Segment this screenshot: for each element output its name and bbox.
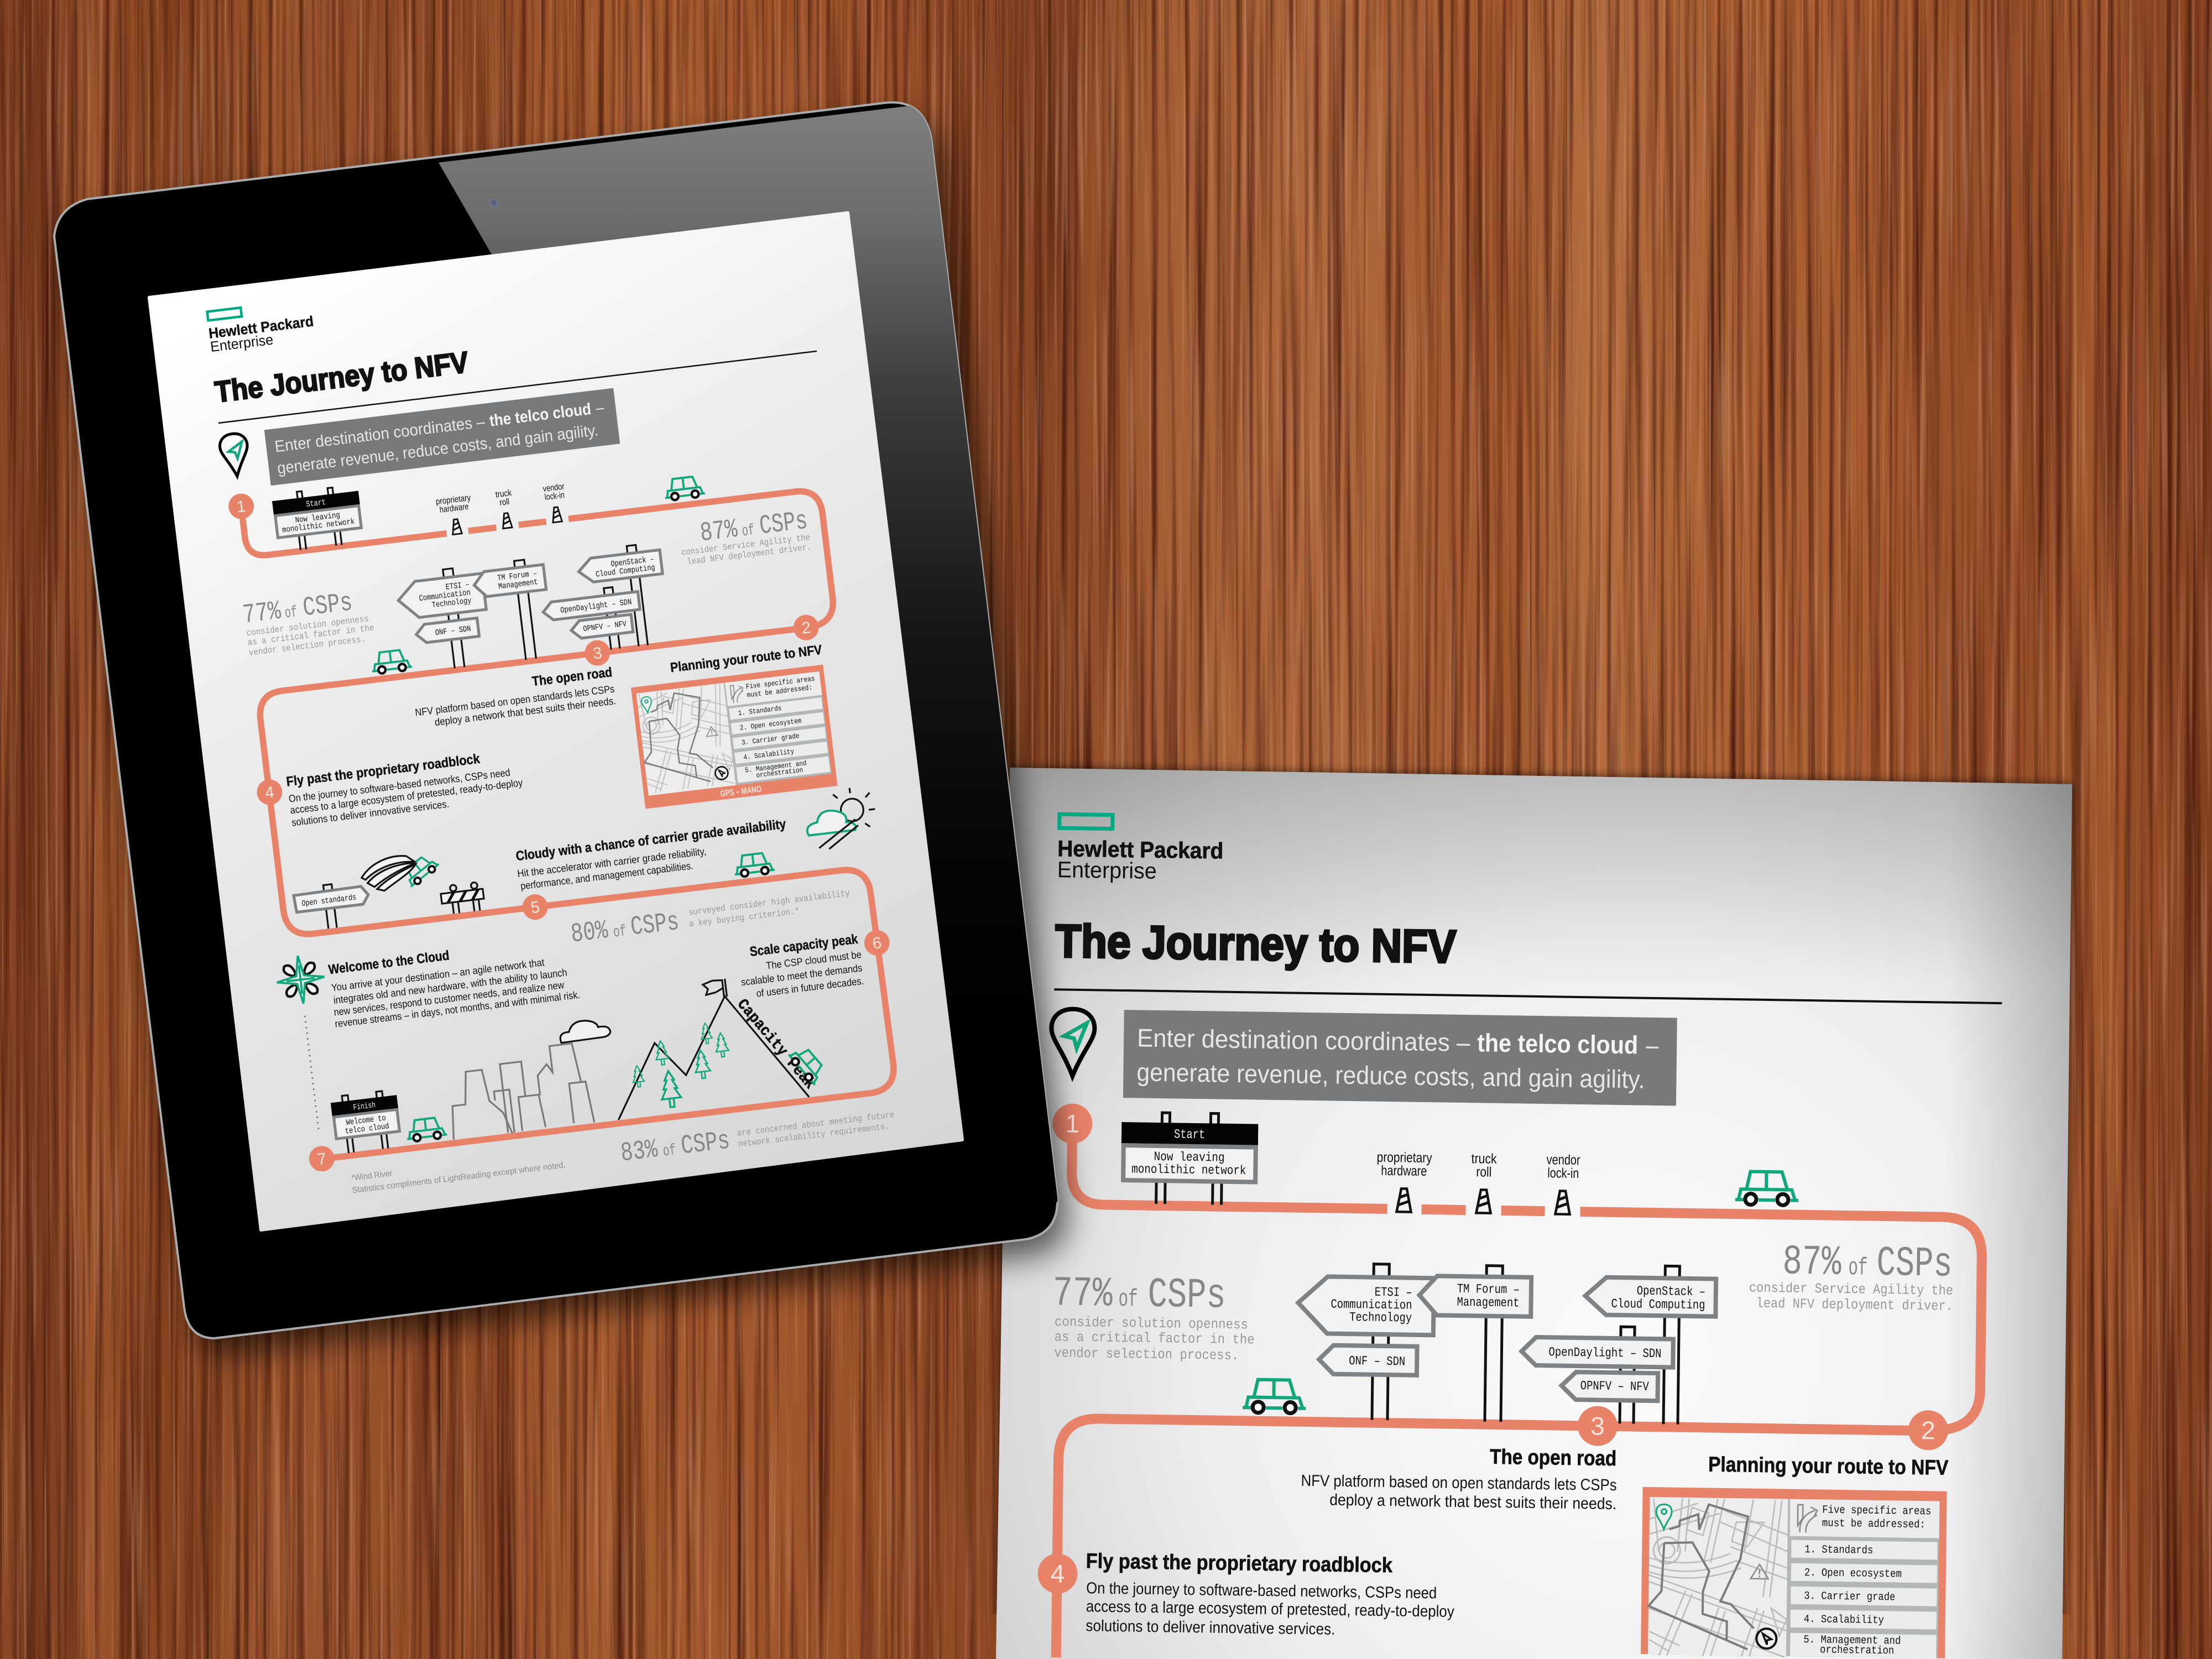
tablet logo: Hewlett Packard xyxy=(208,312,315,342)
tablet start sign xyxy=(272,484,364,552)
tablet intro banner: generate revenue, reduce costs, and gain agility. xyxy=(276,421,599,478)
tablet stat 80 percent: of xyxy=(612,923,627,942)
tablet stat 80 percent: CSPs xyxy=(629,907,681,943)
tablet signposts right group xyxy=(536,542,671,657)
tablet signposts right group: OPNFV – NFV xyxy=(583,620,627,634)
tablet signposts right group: OpenDaylight – SDN xyxy=(560,598,632,615)
tablet text: the open road: The open road xyxy=(531,665,613,689)
flyer step markers: 4 xyxy=(1050,1559,1065,1588)
tablet text: scale capacity peak: Scale capacity peak xyxy=(749,932,859,959)
flyer signposts left group: ONF – SDN xyxy=(1349,1354,1405,1369)
tablet title: The Journey to NFV xyxy=(213,346,470,409)
tablet icon: compass xyxy=(274,953,327,1006)
tablet signposts right group: Cloud Computing xyxy=(595,564,656,580)
flyer signposts left group: TM Forum – xyxy=(1457,1282,1520,1297)
tablet stat 80 percent: surveyed consider high availability xyxy=(688,888,851,917)
tablet text: fly past the proprietary roadblock: access to a large ecosystem of pretested, ready-to-deploy xyxy=(289,776,524,816)
tablet map panel: 1. Standards xyxy=(738,704,782,717)
tablet cones and roadblock labels xyxy=(435,482,568,536)
tablet step markers: 3 xyxy=(592,644,603,663)
tablet start sign: Start xyxy=(306,498,326,509)
tablet stat 77 percent: of xyxy=(284,604,298,623)
flyer signposts left group: ETSI – xyxy=(1375,1285,1412,1300)
tablet icon: city skyline xyxy=(444,1042,594,1140)
tablet text: cloudy with a chance xyxy=(514,817,790,892)
tablet camera xyxy=(490,199,498,207)
flyer stat 77 percent: vendor selection process. xyxy=(1054,1345,1239,1364)
flyer signposts right group: OpenStack – xyxy=(1637,1284,1705,1299)
flyer stat 87 percent: of xyxy=(1848,1254,1868,1282)
tablet step markers: 4 xyxy=(264,783,275,802)
flyer stat 87 percent: consider Service Agility the xyxy=(1749,1280,1953,1299)
flyer text: fly past the proprietary roadblock xyxy=(1085,1550,1455,1640)
flyer stat 87 percent: lead NFV deployment driver. xyxy=(1756,1296,1953,1314)
tablet text: fly past the proprietary roadblock: On the journey to software-based networks, CSPs need xyxy=(288,766,511,805)
tablet intro banner xyxy=(264,388,620,486)
tablet intro banner: the telco cloud xyxy=(488,400,592,430)
flyer cones and roadblock labels: roll xyxy=(1476,1164,1492,1180)
tablet map panel: must be addressed: xyxy=(747,684,813,700)
tablet map panel: Five specific areas xyxy=(745,675,815,691)
flyer map panel: orchestration xyxy=(1820,1644,1894,1657)
flyer stat 77 percent: consider solution openness xyxy=(1055,1314,1248,1333)
flyer step markers: 2 xyxy=(1921,1416,1936,1444)
tablet device xyxy=(54,102,1062,1338)
flyer logo: Enterprise xyxy=(1057,857,1157,884)
tablet cones and roadblock labels: vendor xyxy=(542,482,565,494)
tablet signposts left group xyxy=(395,557,554,674)
tablet intro banner: Enter destination coordinates – xyxy=(274,413,487,456)
tablet finish sign: Finish xyxy=(353,1101,376,1113)
flyer map panel: 2. Open ecosystem xyxy=(1804,1567,1902,1581)
tablet text: the open road: NFV platform based on open standards lets CSPs xyxy=(414,683,615,718)
flyer map panel: 1. Standards xyxy=(1804,1543,1873,1557)
tablet text: welcome to the cloud: integrates old and new hardware, with the ability to launch xyxy=(333,966,568,1006)
tablet stat 77 percent: 77% xyxy=(241,596,283,631)
flyer stat 77 percent: of xyxy=(1118,1286,1138,1314)
tablet stat 87 percent: 87% xyxy=(698,514,739,549)
flyer title: The Journey to NFV xyxy=(1055,915,1457,973)
flyer cones and roadblock labels: lock-in xyxy=(1547,1165,1579,1181)
tablet start sign: monolithic network xyxy=(282,518,355,535)
flyer logo xyxy=(1057,814,1224,885)
tablet text: welcome to the cloud: revenue streams – in days, not months, and with minimal risk. xyxy=(334,989,581,1030)
tablet icon: destination pin xyxy=(218,432,251,478)
tablet stat 83 percent: network scalability requirements. xyxy=(738,1121,890,1150)
tablet screen xyxy=(149,213,962,1230)
tablet footnote: Statistics compliments of LightReading except where noted. xyxy=(352,1160,566,1195)
flyer green car 1 xyxy=(1735,1171,1798,1206)
tablet map panel: GPS – MANO xyxy=(719,785,762,799)
printed flyer sheet xyxy=(996,768,2072,1659)
flyer text: fly past the proprietary roadblock: On the journey to software-based networks, CSPs need xyxy=(1086,1579,1437,1602)
tablet stat 87 percent: CSPs xyxy=(758,506,809,542)
tablet finish sign xyxy=(330,1089,403,1155)
tablet text: the open road: deploy a network that best suits their needs. xyxy=(434,695,617,728)
tablet heading: planning your route: Planning your route to NFV xyxy=(670,643,823,676)
tablet icon: cloud over city xyxy=(559,1018,611,1043)
flyer green car 2 xyxy=(1243,1379,1306,1413)
flyer signposts right group: OpenDaylight – SDN xyxy=(1548,1345,1662,1361)
tablet green car 3 xyxy=(733,852,775,878)
tablet footnote: *Wind River xyxy=(351,1168,393,1183)
tablet stat 83 percent: of xyxy=(662,1142,677,1161)
tablet text: the open road xyxy=(412,665,617,730)
flyer intro banner: Enter destination coordinates – xyxy=(1137,1023,1470,1057)
flyer map panel xyxy=(1641,1487,1947,1659)
tablet open standards sign: Open standards xyxy=(301,893,357,909)
flyer text: fly past the proprietary roadblock: access to a large ecosystem of pretested, ready-to-deploy xyxy=(1086,1598,1454,1621)
flyer stat 77 percent: as a critical factor in the xyxy=(1054,1329,1255,1348)
tablet stat 87 percent: lead NFV deployment driver. xyxy=(686,542,812,567)
tablet text: welcome to the cloud: new services, respond to customer needs, and realize new xyxy=(333,979,565,1018)
tablet text: welcome to the cloud: Welcome to the Cloud xyxy=(327,948,450,977)
tablet cones and roadblock labels: lock-in xyxy=(544,491,565,502)
tablet stat 77 percent: vendor selection process. xyxy=(248,634,366,658)
flyer heading: planning your route: Planning your route to NFV xyxy=(1708,1453,1949,1480)
tablet text: cloudy with a chance: Hit the accelerator with carrier grade reliability, xyxy=(517,845,707,879)
tablet map panel: 5. Management and xyxy=(744,759,807,775)
tablet intro banner: – xyxy=(595,398,606,418)
tablet stat 80 percent: 80% xyxy=(569,915,610,950)
tablet signposts left group: TM Forum – xyxy=(497,570,538,583)
flyer signposts left group: Management xyxy=(1457,1295,1520,1311)
tablet step markers: 7 xyxy=(316,1150,327,1168)
tablet signposts left group: Management xyxy=(498,578,539,592)
flyer signposts right group xyxy=(1521,1264,1716,1425)
tablet icon: mountains with trees and flag xyxy=(603,968,831,1120)
tablet drop shadow xyxy=(64,119,1067,1355)
tablet step markers: 5 xyxy=(530,898,541,917)
tablet step markers: 6 xyxy=(872,933,883,953)
flyer cones and roadblock labels: hardware xyxy=(1381,1163,1427,1179)
tablet stat 80 percent xyxy=(569,886,853,950)
tablet stat 87 percent: of xyxy=(741,522,755,541)
flyer map panel: Five specific areas xyxy=(1822,1504,1931,1518)
tablet stat 80 percent: a key buying criterion.* xyxy=(688,906,800,929)
flyer road route xyxy=(1056,1123,1983,1659)
tablet map panel: 3. Carrier grade xyxy=(741,732,800,747)
tablet finish sign: Welcome to xyxy=(346,1114,387,1128)
flyer start sign xyxy=(1121,1112,1259,1206)
tablet road route xyxy=(235,437,896,1160)
flyer step markers: 1 xyxy=(1065,1109,1079,1138)
tablet cones and roadblock labels: roll xyxy=(499,497,510,508)
tablet icon: mountains with trees and flag: Capacity Peak xyxy=(733,996,818,1093)
flyer stat 77 percent: CSPs xyxy=(1147,1271,1226,1320)
tablet text: cloudy with a chance: performance, and management capabilities. xyxy=(520,859,693,892)
tablet stat 87 percent xyxy=(677,505,812,567)
flyer stat 77 percent: 77% xyxy=(1052,1270,1113,1318)
tablet dotted route line xyxy=(305,1016,319,1130)
tablet green car 2 xyxy=(370,649,413,675)
flyer text: the open road: deploy a network that best suits their needs. xyxy=(1329,1491,1616,1513)
flyer signposts right group: OPNFV – NFV xyxy=(1580,1379,1649,1394)
tablet signposts left group: Technology xyxy=(431,597,472,610)
flyer text: the open road xyxy=(1301,1443,1617,1513)
tablet text: fly past the proprietary roadblock: Fly past the proprietary roadblock xyxy=(285,752,481,790)
flyer map panel: must be addressed: xyxy=(1822,1517,1926,1531)
flyer cones and roadblock labels: proprietary xyxy=(1376,1150,1432,1166)
tablet stat 83 percent: 83% xyxy=(619,1134,660,1169)
flyer map panel: 4. Scalability xyxy=(1804,1613,1884,1627)
flyer cones and roadblock labels: truck xyxy=(1471,1151,1497,1167)
tablet signposts left group: ONF – SDN xyxy=(435,625,472,638)
tablet stat 83 percent xyxy=(619,1106,897,1169)
flyer stat 87 percent: CSPs xyxy=(1876,1240,1953,1288)
tablet text: fly past the proprietary roadblock: solutions to deliver innovative services. xyxy=(291,798,450,828)
tablet text: fly past the proprietary roadblock xyxy=(285,747,525,828)
tablet stat 77 percent: consider solution openness xyxy=(246,614,369,638)
tablet step markers xyxy=(221,423,909,1174)
flyer cones and roadblock labels: vendor xyxy=(1546,1152,1580,1168)
tablet text: scale capacity peak xyxy=(737,931,865,1001)
tablet logo xyxy=(206,299,316,355)
tablet finish sign: telco cloud xyxy=(345,1122,390,1136)
tablet icon: sun and cloud xyxy=(803,785,879,851)
tablet map panel xyxy=(631,665,838,809)
flyer icon: destination pin xyxy=(1051,1009,1095,1076)
flyer stat 87 percent: 87% xyxy=(1782,1238,1841,1287)
tablet green car 1 xyxy=(663,476,705,501)
flyer intro banner: the telco cloud xyxy=(1477,1028,1638,1060)
tablet signposts right group: OpenStack – xyxy=(611,555,655,569)
tablet logo: Enterprise xyxy=(209,331,274,355)
flyer step markers: 3 xyxy=(1590,1411,1605,1441)
flyer content xyxy=(1037,814,2004,1659)
tablet stat 77 percent: CSPs xyxy=(301,587,354,624)
tablet step markers: 1 xyxy=(236,497,247,517)
flyer signposts left group xyxy=(1297,1263,1531,1422)
tablet cones and roadblock labels: truck xyxy=(495,488,512,499)
tablet stat 87 percent: consider Service Agility the xyxy=(681,533,811,558)
tablet text: welcome to the cloud: You arrive at your destination – an agile network that xyxy=(331,956,545,993)
tablet text: scale capacity peak: of users in future decades. xyxy=(755,975,864,999)
tablet stat 77 percent: as a critical factor in the xyxy=(247,623,375,648)
tablet green car 4 xyxy=(405,1117,447,1142)
tablet cones and roadblock labels: proprietary xyxy=(435,493,471,507)
flyer text: the open road: The open road xyxy=(1490,1446,1616,1470)
tablet bezel xyxy=(54,102,1057,1338)
flyer text: fly past the proprietary roadblock: solutions to deliver innovative services. xyxy=(1086,1617,1335,1639)
tablet open standards sign xyxy=(293,880,372,932)
tablet stat 77 percent xyxy=(241,585,376,658)
flyer map panel: 3. Carrier grade xyxy=(1804,1590,1895,1604)
tablet page content xyxy=(196,240,914,1207)
flyer start sign: Start xyxy=(1174,1127,1205,1142)
flyer signposts left group: Technology xyxy=(1349,1310,1412,1326)
flyer map panel: 5. Management and xyxy=(1803,1634,1901,1648)
flyer intro banner xyxy=(1123,1010,1677,1106)
flyer text: the open road: NFV platform based on open standards lets CSPs xyxy=(1301,1472,1617,1494)
tablet map panel: orchestration xyxy=(756,766,804,780)
flyer text: fly past the proprietary roadblock: Fly past the proprietary roadblock xyxy=(1086,1550,1393,1577)
flyer logo: Hewlett Packard xyxy=(1057,836,1224,864)
tablet text: scale capacity peak: The CSP cloud must be xyxy=(765,948,862,972)
tablet start sign: Now leaving xyxy=(295,511,341,525)
flyer stat 87 percent xyxy=(1749,1238,1954,1314)
flyer step markers xyxy=(1037,1103,1952,1606)
tablet stat 83 percent: are concerned about meeting future xyxy=(737,1110,895,1139)
tablet text: welcome to the cloud xyxy=(327,933,581,1030)
tablet signposts left group: Communication xyxy=(419,588,471,603)
tablet bezel glare xyxy=(439,103,1062,1206)
flyer cones and roadblock labels xyxy=(1376,1150,1580,1214)
flyer signposts right group: Cloud Computing xyxy=(1611,1297,1705,1312)
tablet text: cloudy with a chance: Cloudy with a chance of carrier grade availability xyxy=(515,817,787,864)
flyer intro banner: – xyxy=(1646,1031,1659,1060)
tablet map panel: 2. Open ecosystem xyxy=(739,717,802,732)
tablet signposts left group: ETSI – xyxy=(445,581,470,592)
flyer signposts left group: Communication xyxy=(1331,1297,1412,1313)
tablet icon: road barrier xyxy=(440,881,485,915)
flyer start sign: Now leaving xyxy=(1154,1150,1225,1165)
tablet text: scale capacity peak: scalable to meet the demands xyxy=(740,962,863,988)
tablet icon: winged flying car xyxy=(359,850,443,895)
flyer stat 77 percent xyxy=(1052,1270,1255,1364)
flyer intro banner: generate revenue, reduce costs, and gain agility. xyxy=(1136,1057,1645,1094)
tablet map panel: 4. Scalability xyxy=(743,747,795,761)
tablet stat 83 percent: CSPs xyxy=(680,1126,732,1162)
tablet cones and roadblock labels: hardware xyxy=(439,502,469,515)
flyer start sign: monolithic network xyxy=(1131,1162,1246,1178)
tablet step markers: 2 xyxy=(801,618,812,638)
